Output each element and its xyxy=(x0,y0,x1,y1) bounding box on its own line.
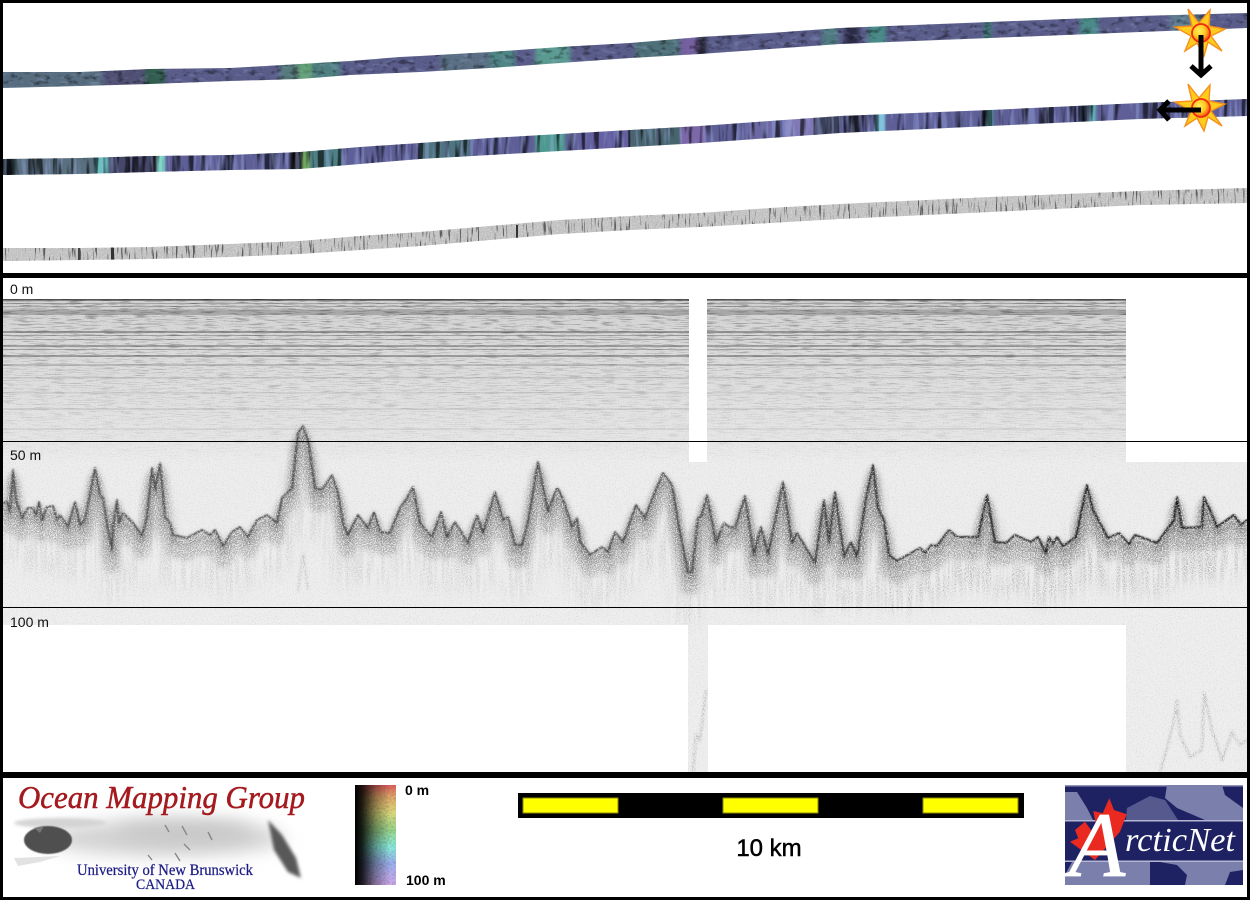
scale label: 10 km xyxy=(736,835,802,862)
seafloor echo: mid shadow xyxy=(3,441,1247,587)
logo country: CANADA xyxy=(136,877,195,893)
logo wordmark: rcticNet xyxy=(1125,822,1237,859)
seafloor echo: deep fan xyxy=(3,466,1247,612)
strip: backscatter-draped swath, strong shading xyxy=(3,99,1247,175)
arrow: pointing down between swaths xyxy=(1191,35,1211,75)
strip: grey sidescan backscatter swath xyxy=(3,188,1247,261)
logo background seabed image xyxy=(14,818,301,878)
legend: depth colour bar xyxy=(355,785,396,885)
icon: maple leaf xyxy=(1070,798,1127,860)
depth label: 0 m: 0 m xyxy=(10,281,33,297)
seafloor echo: bright return line xyxy=(3,426,1247,572)
legend label: 100 m: 100 m xyxy=(406,872,446,888)
logo map land xyxy=(1065,785,1243,885)
logo: Ocean Mapping Group xyxy=(14,779,305,893)
scale bar xyxy=(518,793,1024,818)
depth label: 100 m: 100 m xyxy=(10,614,49,630)
icon: sun marker on upper swath xyxy=(1175,9,1225,56)
second return: right block xyxy=(1160,692,1247,772)
side echo under tall peak xyxy=(298,552,308,592)
depth line: 100 m xyxy=(3,607,1247,608)
logo: ArcticNet xyxy=(1063,785,1243,896)
depth line: 50 m xyxy=(3,441,1247,442)
depth label: 50 m: 50 m xyxy=(10,447,41,463)
arrow: pointing left along swath xyxy=(1160,101,1201,120)
reverberation bands xyxy=(3,299,1126,430)
strip: bathymetry swath, soft shading xyxy=(3,13,1247,88)
legend label: 0 m: 0 m xyxy=(405,782,429,798)
panel: footer legend and logos xyxy=(3,778,1247,897)
panel: water column profile xyxy=(0,278,1250,779)
logo title: Ocean Mapping Group xyxy=(18,779,305,815)
second return: central gap xyxy=(693,690,706,772)
water column echogram xyxy=(0,299,1250,779)
logo subtitle: University of New Brunswick xyxy=(77,862,253,879)
logo letter A: A xyxy=(1063,794,1126,896)
seafloor echo: near shadow xyxy=(3,431,1247,577)
panel: multibeam swath strips xyxy=(0,0,1250,273)
logo map band xyxy=(1065,821,1243,861)
icon: sun marker on lower swath xyxy=(1175,84,1225,131)
